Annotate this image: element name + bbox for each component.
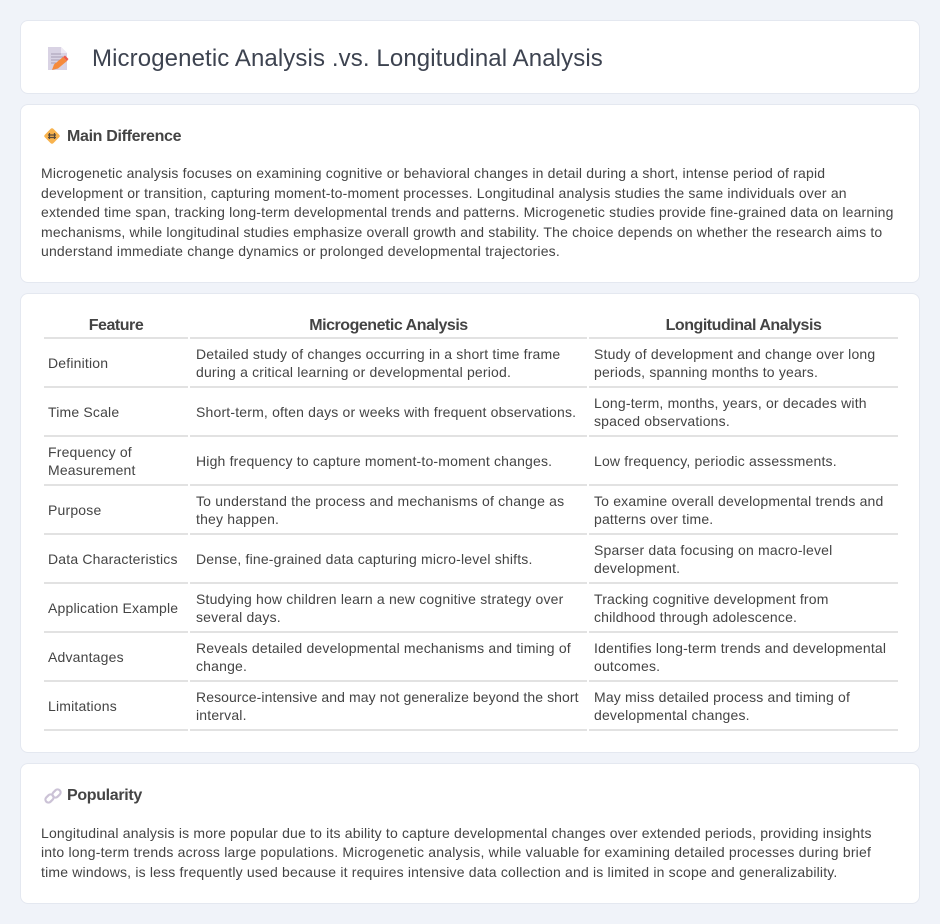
- row: data characteristics: Data Characteristics: [48, 551, 178, 567]
- row: advantages: Reveals detailed developmental mechanisms and timing of: [196, 640, 571, 656]
- title: Microgenetic Analysis .vs. Longitudinal Analysis: [92, 45, 603, 72]
- row: purpose: To examine overall developmental trends and: [594, 493, 883, 509]
- row: application example: Studying how children learn a new cognitive strategy over: [196, 591, 563, 607]
- row: data characteristics: Dense, fine-grained data capturing micro-level shifts.: [196, 551, 533, 567]
- row: definition: periods, spanning months to years.: [594, 364, 818, 380]
- icon: chain link: [44, 788, 62, 804]
- table header row: [89, 317, 822, 334]
- row: definition: Detailed study of changes occurring in a short time frame: [196, 346, 560, 362]
- row: definition: Study of development and change over long: [594, 346, 875, 362]
- row: application example: childhood through adolescence.: [594, 609, 797, 625]
- row: time scale: spaced observations.: [594, 413, 730, 429]
- row: application example: Tracking cognitive development from: [594, 591, 829, 607]
- row: data characteristics: Sparser data focusing on macro-level: [594, 542, 832, 558]
- row: purpose: Purpose: [48, 502, 101, 518]
- row: data characteristics: development.: [594, 560, 680, 576]
- icon: document with pencil: [48, 47, 68, 70]
- row: frequency of measurement: High frequency to capture moment-to-moment changes.: [196, 453, 552, 469]
- text: popularity paragraph: Longitudinal analysis is more popular due to its ability to capture developmental changes over extended periods, providing insights: [41, 825, 872, 841]
- row: frequency of measurement: Frequency of: [48, 444, 132, 460]
- row: limitations: developmental changes.: [594, 707, 750, 723]
- panel: main difference: [20, 104, 920, 283]
- row: application example: Application Example: [48, 600, 178, 616]
- row: purpose: [48, 493, 883, 527]
- text: main difference paragraph: [41, 165, 894, 259]
- row: advantages: Identifies long-term trends and developmental: [594, 640, 886, 656]
- row: advantages: outcomes.: [594, 658, 660, 674]
- row: advantages: [48, 640, 886, 674]
- row: purpose: they happen.: [196, 511, 279, 527]
- text: main difference paragraph: mechanisms, while longitudinal studies emphasize overall growth and stability. The choice depends on whether the research aims to: [41, 224, 882, 240]
- row: frequency of measurement: Low frequency, periodic assessments.: [594, 453, 837, 469]
- row: advantages: Advantages: [48, 649, 124, 665]
- row: purpose: patterns over time.: [594, 511, 713, 527]
- text: main difference paragraph: Microgenetic analysis focuses on examining cognitive or behavioral changes in detail during a short, intense period of rapid: [41, 165, 825, 181]
- text: main difference paragraph: extended time span, tracking long-term developmental trends and patterns. Microgenetic studies provide fine-grained data on learning: [41, 204, 894, 220]
- row: advantages: change.: [196, 658, 247, 674]
- heading: popularity: Popularity: [67, 787, 142, 804]
- row: definition: during a critical learning or developmental period.: [196, 364, 511, 380]
- row: definition: [48, 346, 875, 380]
- row: definition: Definition: [48, 355, 108, 371]
- text: popularity paragraph: into long-term trends across large populations. Microgenetic analysis, while valuable for examining detailed processes during brief: [41, 844, 871, 860]
- row: frequency of measurement: [48, 444, 837, 478]
- row: purpose: To understand the process and mechanisms of change as: [196, 493, 564, 509]
- row: limitations: Limitations: [48, 698, 117, 714]
- text: main difference paragraph: understand immediate change dynamics or prolonged developmental trajectories.: [41, 243, 560, 259]
- table header row: Longitudinal Analysis: [666, 317, 821, 334]
- row: application example: [48, 591, 829, 625]
- icon: warning diamond: [44, 128, 60, 144]
- text: popularity paragraph: [41, 825, 872, 880]
- row: time scale: [48, 395, 867, 429]
- row: limitations: Resource-intensive and may not generalize beyond the short: [196, 689, 579, 705]
- heading: main difference: Main Difference: [67, 128, 181, 145]
- row: data characteristics: [48, 542, 832, 576]
- row: time scale: Long-term, months, years, or decades with: [594, 395, 867, 411]
- row: application example: several days.: [196, 609, 281, 625]
- text: popularity paragraph: time windows, is less frequently used because it requires intensive data collection and is limited in scope and generalizability.: [41, 864, 837, 880]
- panel: comparison table: [20, 293, 920, 753]
- row: limitations: interval.: [196, 707, 247, 723]
- table header row: Microgenetic Analysis: [309, 317, 468, 334]
- row: time scale: Time Scale: [48, 404, 119, 420]
- table header row: Feature: [89, 317, 143, 334]
- row: limitations: May miss detailed process and timing of: [594, 689, 850, 705]
- row: frequency of measurement: Measurement: [48, 462, 136, 478]
- row: limitations: [48, 689, 850, 723]
- panel: header: [20, 20, 920, 94]
- text: main difference paragraph: development or transition, capturing moment-to-moment processes. Longitudinal analysis studies the same individuals over an: [41, 185, 847, 201]
- panel: popularity: [20, 763, 920, 904]
- row: time scale: Short-term, often days or weeks with frequent observations.: [196, 404, 576, 420]
